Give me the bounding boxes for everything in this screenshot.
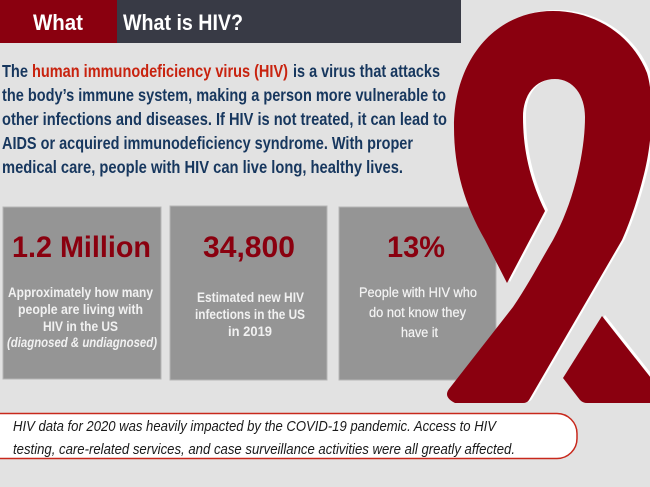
intro text block: the body’s immune system, making a person more vulnerable to <box>2 85 446 105</box>
callout text: HIV data for 2020 was heavily impacted by the COVID-19 pandemic. Access to HIV <box>13 418 498 435</box>
stat description: People with HIV who <box>359 285 477 300</box>
stat description: HIV in the US <box>43 319 118 334</box>
intro text block: The <box>2 61 28 81</box>
stat description: do not know they <box>369 305 466 320</box>
header tab label: What <box>33 10 84 35</box>
stat description: Approximately how many <box>8 285 153 300</box>
stat description: infections in the US <box>195 307 305 322</box>
callout text: testing, care-related services, and case surveillance activities were all greatly affected. <box>13 441 515 458</box>
stat description <box>195 290 305 339</box>
stat description: people are living with <box>18 302 143 317</box>
stat description <box>7 285 157 350</box>
title: What is HIV? <box>123 10 243 35</box>
icon: awareness ribbon <box>447 10 650 403</box>
stat card: 34,800 <box>170 206 327 380</box>
stat description: in 2019 <box>228 324 272 339</box>
stat number: 1.2 Million <box>12 231 151 264</box>
stat description: have it <box>401 325 438 340</box>
intro text block: is a virus that attacks <box>293 61 440 81</box>
intro text block: medical care, people with HIV can live long, healthy lives. <box>2 157 403 177</box>
callout <box>0 414 577 458</box>
intro text block: other infections and diseases. If HIV is not treated, it can lead to <box>2 109 447 129</box>
header bar <box>0 0 461 43</box>
intro text block: AIDS or acquired immunodeficiency syndrome. With proper <box>2 133 413 153</box>
stat description: Estimated new HIV <box>197 290 304 305</box>
intro text block <box>2 61 447 177</box>
stat number: 13% <box>387 231 445 264</box>
stat card: 13% <box>339 207 496 380</box>
stat number: 34,800 <box>203 231 295 264</box>
stat description: (diagnosed & undiagnosed) <box>7 335 157 350</box>
intro text block: human immunodeficiency virus (HIV) <box>32 61 288 81</box>
stat card: 1.2 Million <box>3 207 161 379</box>
callout text <box>13 418 515 458</box>
stat description <box>359 285 477 340</box>
